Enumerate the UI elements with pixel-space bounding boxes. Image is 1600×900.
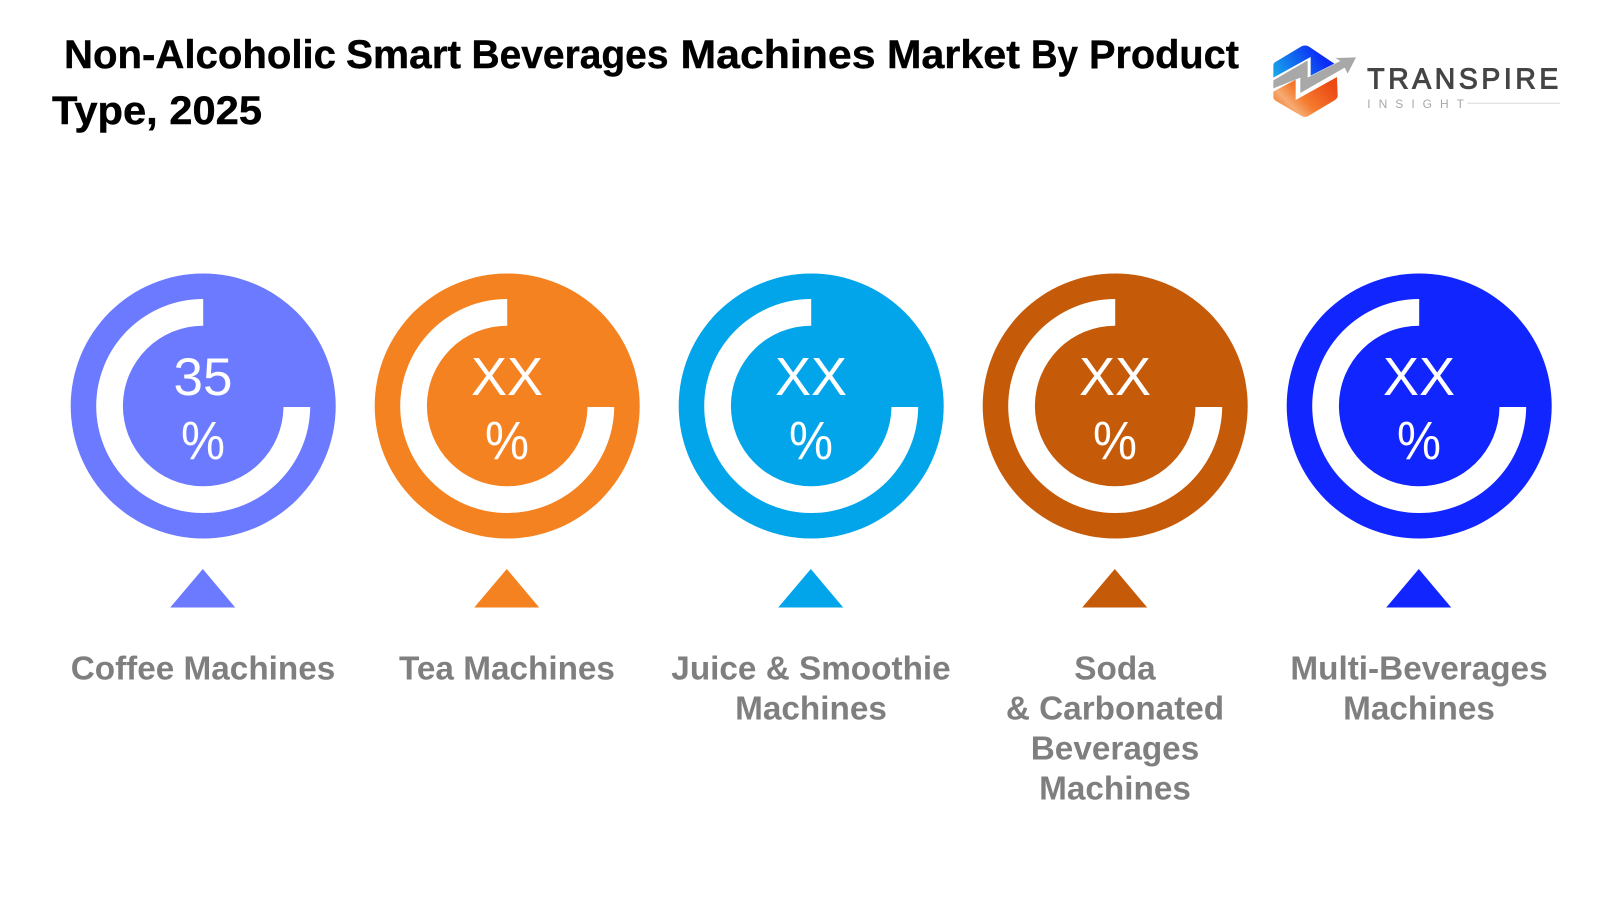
- label: Machines: [1039, 770, 1191, 808]
- triangle marker: [1386, 569, 1451, 608]
- value: XX%: %: [1397, 411, 1441, 471]
- value: XX%: [1383, 347, 1455, 471]
- label: [1006, 650, 1224, 808]
- donut: Coffee Machines: [71, 274, 336, 538]
- label: Juice & Smoothie: [671, 650, 951, 688]
- panel: Coffee Machines: [71, 274, 336, 688]
- label: Soda: [1074, 650, 1156, 688]
- donut: Tea Machines: [375, 274, 640, 538]
- title: Machines: [680, 33, 876, 77]
- triangle marker: [778, 569, 843, 608]
- value: XX%: %: [1093, 411, 1137, 471]
- title: Market: [887, 33, 1020, 77]
- value: XX%: XX: [1383, 347, 1455, 407]
- label: & Carbonated: [1006, 690, 1224, 728]
- value: XX%: XX: [775, 347, 847, 407]
- value: XX%: [1079, 347, 1151, 471]
- title: Beverages: [472, 33, 668, 77]
- value: XX%: XX: [471, 347, 543, 407]
- logo icon: hexagon with arrow: [1273, 45, 1356, 117]
- label: Machines: [1343, 690, 1495, 728]
- value: XX%: %: [789, 411, 833, 471]
- label: Beverages: [1031, 730, 1199, 768]
- label: Multi-Beverages: [1290, 650, 1548, 688]
- panel: Juice & Smoothie Machines: [671, 274, 951, 728]
- label: Machines: [735, 690, 887, 728]
- title: Smart: [346, 33, 461, 77]
- title: Product: [1089, 33, 1239, 77]
- panel: Multi-Beverages Machines: [1287, 274, 1552, 728]
- logo tagline: INSIGHT: [1367, 97, 1465, 111]
- label: Tea Machines: [399, 650, 615, 688]
- logo wordmark: TRANSPIRE: [1367, 62, 1558, 94]
- label: [1290, 650, 1548, 728]
- donut: Juice & Smoothie Machines: [679, 274, 944, 538]
- value: 35%: %: [181, 411, 225, 471]
- donut: Soda & Carbonated Beverages Machines: [983, 274, 1248, 538]
- panel: Tea Machines: [375, 274, 640, 688]
- donut: Multi-Beverages Machines: [1287, 274, 1552, 538]
- triangle marker: [1082, 569, 1147, 608]
- value: 35%: 35: [174, 348, 232, 407]
- title: Non-Alcoholic: [64, 33, 336, 77]
- panel: Soda & Carbonated Beverages Machines: [983, 274, 1248, 808]
- triangle marker: [170, 569, 235, 608]
- logo: Transpire Insight: [1273, 45, 1560, 117]
- value: 35%: [174, 348, 232, 471]
- title: Type, 2025: [52, 89, 262, 133]
- value: XX%: XX: [1079, 347, 1151, 407]
- triangle marker: [474, 569, 539, 608]
- label: [671, 650, 951, 728]
- label: Coffee Machines: [71, 650, 335, 688]
- value: XX%: %: [485, 411, 529, 471]
- title: [52, 33, 1239, 133]
- title: By: [1031, 33, 1079, 77]
- value: XX%: [471, 347, 543, 471]
- value: XX%: [775, 347, 847, 471]
